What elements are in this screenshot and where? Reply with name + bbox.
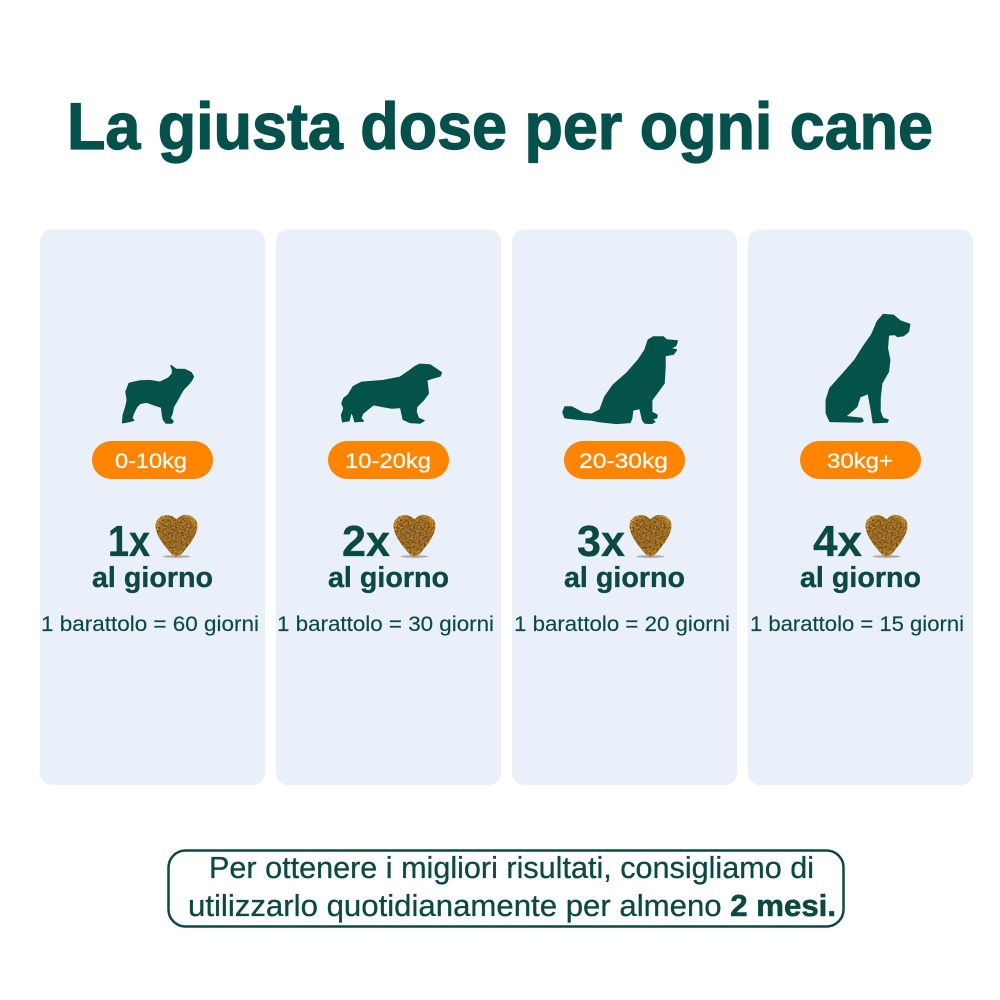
- duration: 1 barattolo = 60 giorni: [41, 613, 259, 636]
- icon: sitting retriever silhouette: [563, 337, 677, 423]
- dose: [108, 515, 198, 566]
- duration: 1 barattolo = 30 giorni: [277, 613, 494, 636]
- callout: [168, 850, 844, 926]
- duration: 1 barattolo = 15 giorni: [750, 613, 964, 636]
- frequency: al giorno: [800, 562, 921, 594]
- weight badge: 0-10kg: [115, 450, 187, 473]
- frequency: al giorno: [564, 562, 685, 594]
- duration: 1 barattolo = 20 giorni: [514, 613, 730, 636]
- weight badge: [328, 441, 449, 479]
- dose: 1x: [108, 517, 150, 566]
- icon: great dane silhouette: [826, 315, 910, 423]
- frequency: al giorno: [92, 562, 213, 594]
- icon: small dog silhouette: [123, 366, 193, 423]
- callout: utilizzarlo quotidianamente per almeno 2 mesi.: [188, 889, 836, 923]
- dose: 4x: [813, 517, 863, 566]
- panel: 30kg+: [748, 230, 973, 785]
- panel: 10-20kg: [276, 230, 501, 785]
- icon: medium dog silhouette: [342, 364, 441, 423]
- dose: [813, 515, 908, 566]
- weight badge: [92, 441, 213, 479]
- dose: [577, 515, 672, 566]
- dose: 2x: [342, 517, 391, 566]
- title: La giusta dose per ogni cane: [67, 90, 933, 163]
- weight badge: [564, 441, 685, 479]
- callout: Per ottenere i migliori risultati, consigliamo di: [209, 851, 814, 885]
- panel: 0-10kg: [40, 230, 265, 785]
- weight badge: [800, 441, 921, 479]
- dose: 3x: [577, 517, 626, 566]
- frequency: al giorno: [328, 562, 449, 594]
- dose: [342, 515, 436, 566]
- weight badge: 10-20kg: [345, 450, 431, 473]
- weight badge: 20-30kg: [579, 450, 668, 473]
- panel: 20-30kg: [512, 230, 737, 785]
- weight badge: 30kg+: [827, 450, 893, 473]
